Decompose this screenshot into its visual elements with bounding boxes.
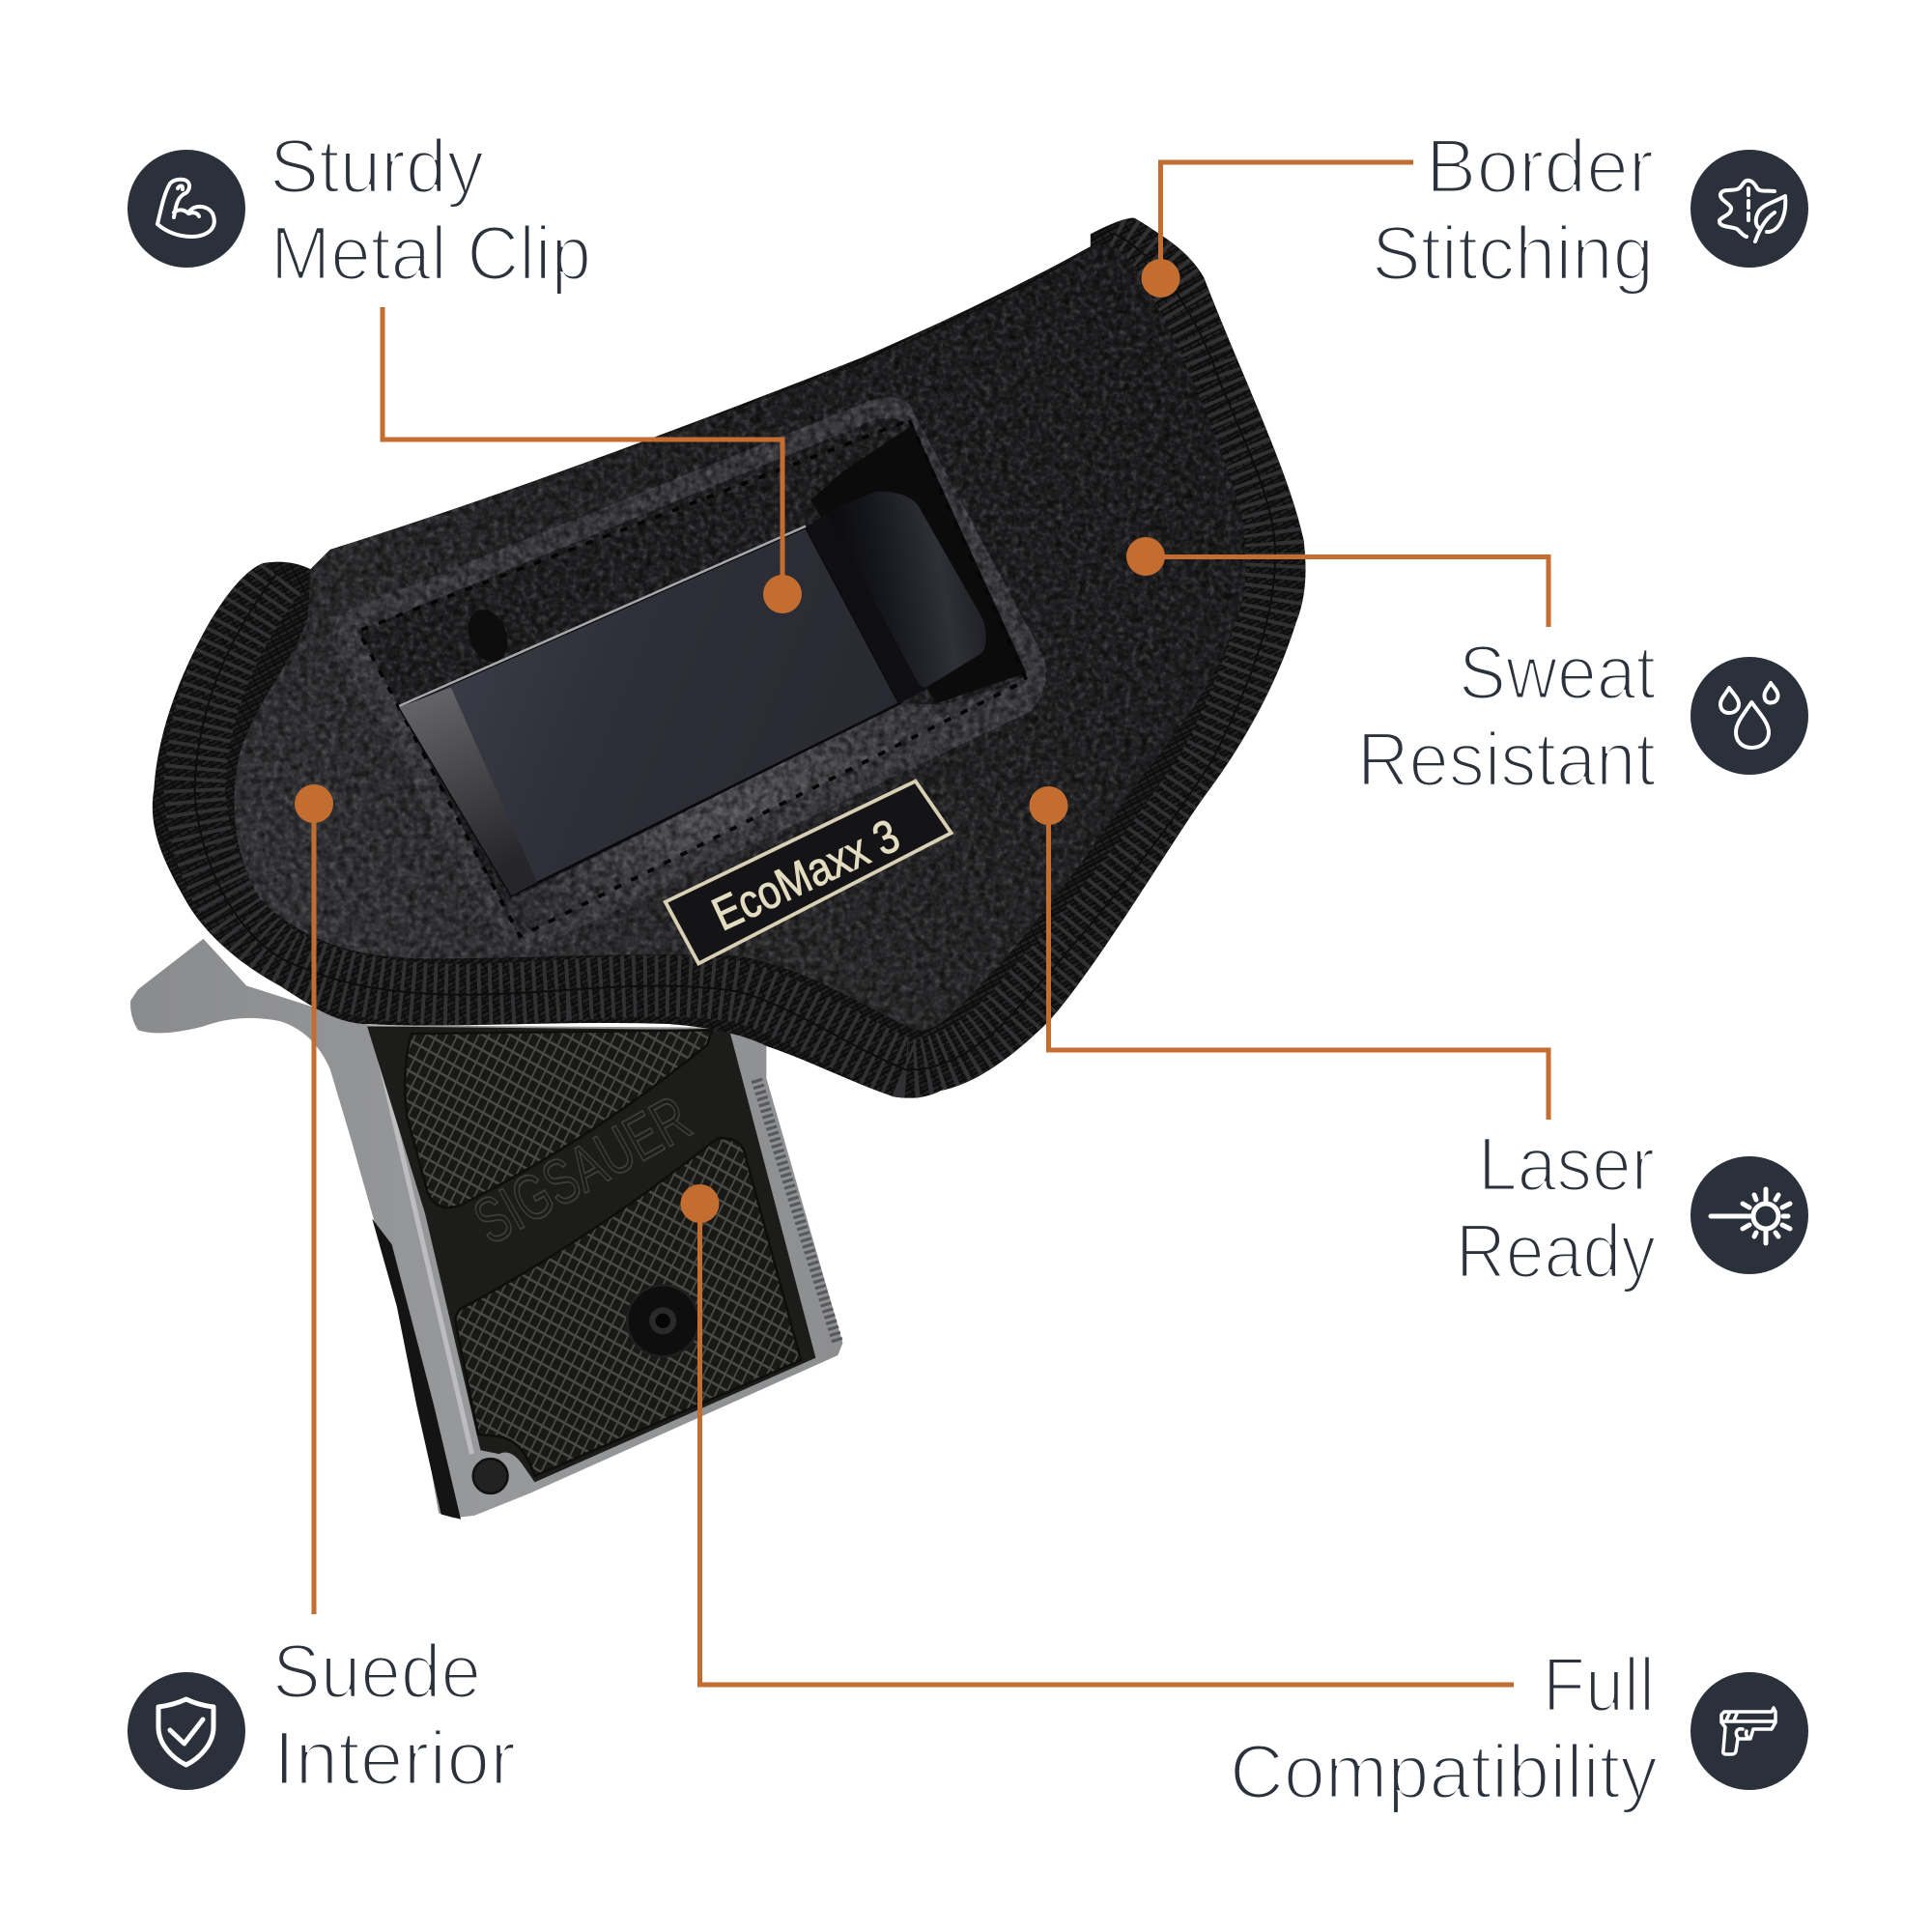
marker dot	[680, 1184, 719, 1223]
marker dot	[1142, 259, 1180, 298]
label text: Compatibility	[1230, 1728, 1658, 1814]
connector line	[1161, 162, 1413, 278]
metal clip fold	[827, 492, 986, 687]
tab slot	[810, 425, 1026, 703]
icon: pistol	[1690, 1672, 1808, 1790]
label text: Ready	[1456, 1208, 1656, 1293]
rivet hole	[462, 604, 515, 668]
clip top highlight	[399, 526, 806, 706]
label text: Stitching	[1372, 210, 1654, 296]
grip panel	[367, 1026, 815, 1482]
label text: Border	[1426, 123, 1654, 209]
label text	[1230, 1641, 1658, 1814]
connector line	[699, 1204, 1514, 1685]
callout: Border Stitching	[1142, 123, 1808, 298]
label text: Sweat	[1459, 629, 1656, 715]
lower textured band	[499, 680, 1026, 936]
holster leather body	[235, 244, 1245, 1030]
clip left strip	[399, 688, 537, 895]
label text	[1372, 123, 1654, 296]
brand badge	[666, 781, 952, 963]
back strap serrations	[372, 1218, 461, 1520]
icon: leather hide and leaf	[1690, 150, 1808, 268]
connector line	[383, 307, 782, 595]
connector line	[1146, 556, 1548, 627]
clip window leather panel	[358, 418, 1026, 936]
label text	[1456, 1121, 1656, 1293]
pistol frame	[130, 939, 842, 1520]
metal clip blade	[399, 527, 899, 895]
icon: laser beam	[1690, 1156, 1808, 1274]
callout: Suede Interior	[128, 784, 516, 1801]
callout: Sturdy Metal Clip	[128, 123, 802, 613]
holster nylon border	[124, 197, 1331, 1122]
label text: Interior	[273, 1715, 516, 1801]
connector line	[311, 804, 317, 1614]
marker dot	[1126, 537, 1165, 576]
clip window surround	[332, 397, 1046, 952]
lower checkered panel	[456, 1138, 801, 1476]
callout: Laser Ready	[1030, 786, 1808, 1293]
label text: Resistant	[1357, 716, 1656, 802]
callout: Sweat Resistant	[1126, 537, 1808, 802]
panel stitching	[358, 420, 1026, 936]
serrated front strap	[756, 1079, 838, 1343]
brand badge: EcoMaxx 3	[704, 810, 907, 941]
grip screw	[627, 1285, 698, 1356]
label text: Full	[1543, 1641, 1655, 1727]
grip logo: SIGSAUER	[463, 1082, 702, 1259]
icon: water drops	[1690, 657, 1808, 775]
upper checkered panel	[405, 1030, 712, 1208]
connector line	[1049, 806, 1548, 1120]
label text: Suede	[272, 1628, 481, 1714]
label text: Sturdy	[270, 123, 484, 209]
label text	[1357, 629, 1656, 802]
product photo: holster with pistol grip	[124, 197, 1331, 1520]
callout: Full Compatibility	[680, 1184, 1808, 1814]
label text: Metal Clip	[270, 210, 591, 296]
icon: flexed arm	[128, 150, 245, 268]
marker dot	[1030, 786, 1068, 825]
label text: Laser	[1478, 1121, 1655, 1207]
frame highlight	[376, 1041, 472, 1454]
marker dot	[295, 784, 333, 823]
clip fold shadow	[806, 513, 929, 703]
marker dot	[763, 575, 802, 613]
icon: shield with check	[128, 1672, 245, 1790]
lower bolt	[473, 1459, 508, 1493]
label text	[272, 1628, 516, 1801]
label text	[270, 123, 591, 296]
